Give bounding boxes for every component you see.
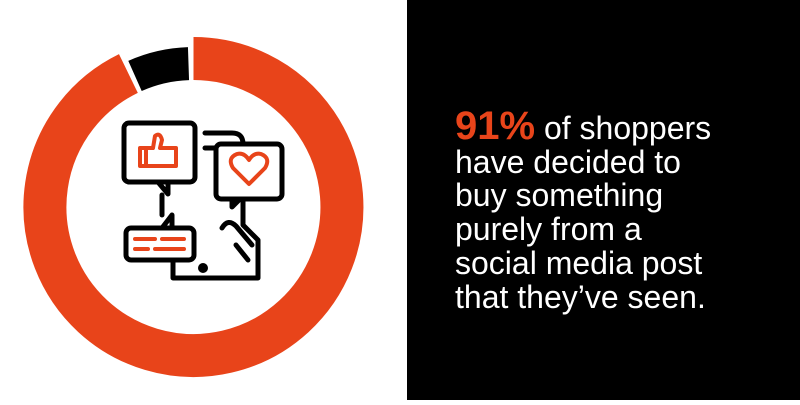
- icon: social media hand: [124, 123, 282, 278]
- text block: statistic: 91% of shoppers: [455, 104, 711, 148]
- text block: statistic: have decided to: [455, 144, 681, 180]
- panel: statistic text: [407, 0, 800, 400]
- text block: statistic: [455, 104, 711, 315]
- panel: donut chart: [0, 0, 407, 400]
- donut ring: [45, 58, 342, 355]
- text block: statistic: purely from a: [455, 211, 642, 247]
- text block: statistic: buy something: [455, 177, 663, 213]
- text block: statistic: social media post: [455, 245, 702, 281]
- text block: statistic: that they’ve seen.: [455, 279, 706, 315]
